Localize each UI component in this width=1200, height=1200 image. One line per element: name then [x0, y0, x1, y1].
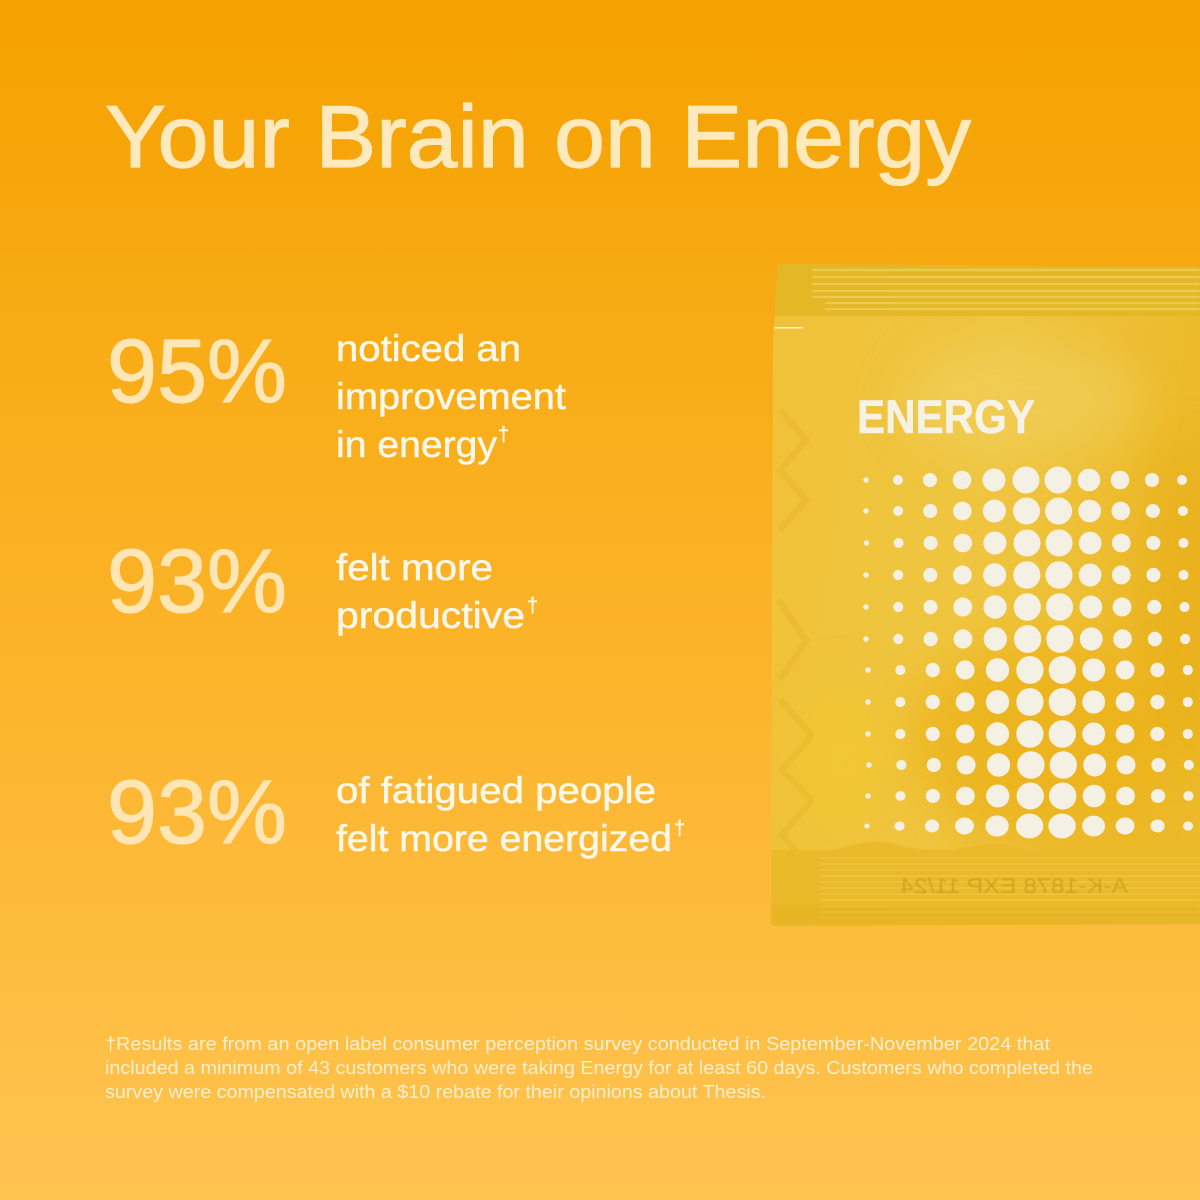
- stat number 95%: 95%: [107, 322, 287, 422]
- stat description productive: [336, 547, 538, 636]
- stat description 95%: in energy: [336, 424, 498, 465]
- stat description fatigued: †: [674, 818, 685, 840]
- footnote: survey were compensated with a $10 rebate for their opinions about Thesis.: [105, 1081, 766, 1102]
- sachet body: [772, 264, 1200, 850]
- stat description 95%: noticed an: [336, 328, 521, 369]
- stat description fatigued: [336, 770, 685, 859]
- stat description 95%: [336, 328, 567, 465]
- stat: 95% improvement in energy: [107, 322, 567, 465]
- product sachet: [765, 260, 1200, 930]
- stat description 95%: †: [498, 424, 509, 446]
- stat description fatigued: of fatigued people: [336, 770, 656, 811]
- stat number 93%: 93%: [107, 532, 287, 632]
- stat: 93% felt more productive: [107, 532, 538, 636]
- top seal: [772, 262, 1200, 328]
- stat description fatigued: felt more energized: [336, 818, 672, 859]
- sachet label: ENERGY: [857, 390, 1035, 443]
- mirrored lot code: A-K-1878 EXP 11/24: [900, 875, 1128, 898]
- bottom seal: [771, 841, 1200, 926]
- stat description productive: †: [527, 595, 538, 617]
- embossed left pattern: [778, 410, 812, 870]
- stat description productive: felt more: [336, 547, 493, 588]
- stat: 93% of fatigued people felt more energized: [107, 763, 685, 863]
- stat description 95%: improvement: [336, 376, 567, 417]
- stat number 93% fatigued: 93%: [107, 763, 287, 863]
- title: Your Brain on Energy: [105, 87, 971, 186]
- halftone dot grid: [863, 466, 1194, 838]
- footnote: included a minimum of 43 customers who were taking Energy for at least 60 days. Customers who completed the: [105, 1057, 1093, 1078]
- footnote: †Results are from an open label consumer perception survey conducted in September-November 2024 that: [105, 1033, 1050, 1054]
- sachet shading: [795, 340, 1200, 840]
- stat description productive: productive: [336, 595, 525, 636]
